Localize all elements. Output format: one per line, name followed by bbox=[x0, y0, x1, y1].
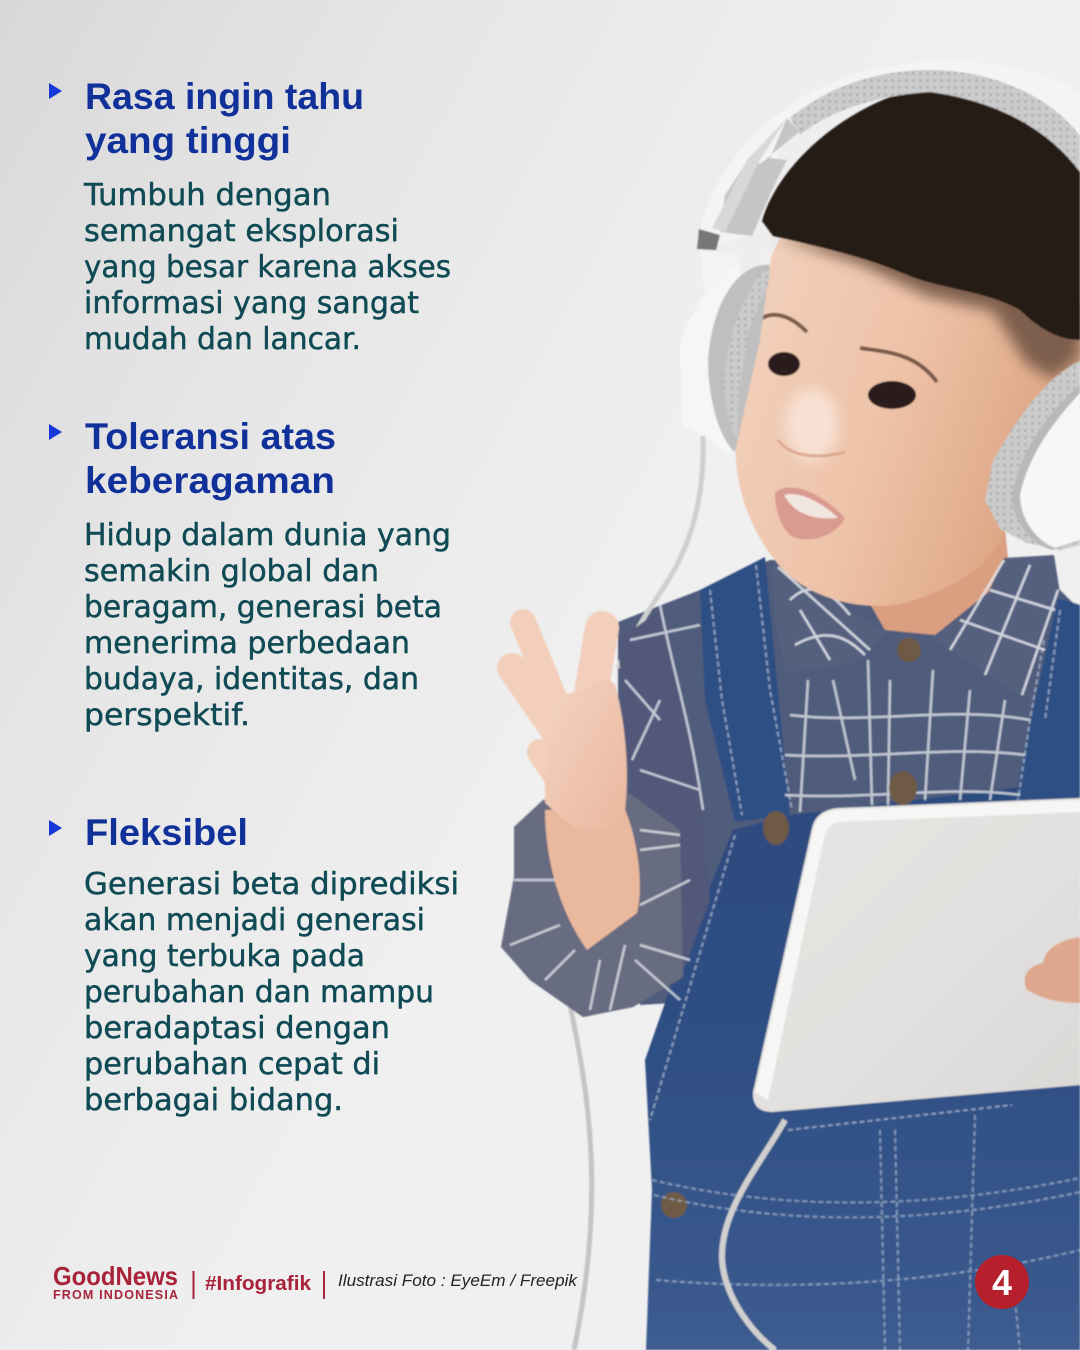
right hand on tablet bbox=[1025, 937, 1080, 1003]
headband slider bbox=[697, 118, 799, 300]
body text: perubahan dan mampu bbox=[84, 975, 434, 1010]
heading: yang tinggi bbox=[85, 120, 291, 161]
heading: Fleksibel bbox=[85, 812, 248, 853]
headphone cable bbox=[618, 436, 703, 668]
right collar bbox=[932, 555, 1060, 697]
heading: keberagaman bbox=[85, 460, 335, 501]
body text: berbagai bidang. bbox=[84, 1083, 343, 1118]
heading: Toleransi atas bbox=[85, 416, 336, 457]
logo: GoodNews from Indonesia bbox=[53, 1261, 178, 1302]
bullet bbox=[49, 83, 62, 99]
mouth bbox=[775, 487, 845, 540]
neck bbox=[845, 530, 1010, 635]
right overall strap bbox=[1013, 598, 1080, 810]
section: curiosity bbox=[49, 76, 451, 357]
body text: menerima perbedaan bbox=[84, 626, 410, 661]
left ear cup bbox=[680, 263, 770, 455]
tablet bbox=[753, 798, 1080, 1112]
strap stitching bbox=[650, 565, 1060, 1130]
fingers bbox=[512, 622, 602, 800]
tablet bevel bbox=[755, 800, 1080, 1100]
body text: Hidup dalam dunia yang bbox=[84, 518, 451, 553]
body text: perspektif. bbox=[84, 698, 250, 733]
rolled cuff bbox=[501, 793, 683, 1017]
body text: semangat eksplorasi bbox=[84, 214, 399, 249]
arm bbox=[545, 805, 640, 950]
headband bbox=[697, 61, 1080, 245]
body text: perubahan cepat di bbox=[84, 1047, 380, 1082]
face bbox=[736, 200, 1080, 606]
logo: GoodNews from Indonesia: GoodNews bbox=[53, 1261, 178, 1291]
photo: child with headphones and tablet bbox=[501, 61, 1080, 1350]
bullet bbox=[49, 424, 62, 440]
footer bbox=[53, 1255, 1029, 1309]
palm bbox=[545, 680, 627, 831]
sleeve bbox=[501, 610, 710, 1017]
body text: yang terbuka pada bbox=[84, 939, 365, 974]
section: flexible bbox=[49, 812, 459, 1118]
sleeve plaid bbox=[510, 830, 690, 1010]
body text bbox=[84, 867, 459, 1118]
right ear cup bbox=[985, 361, 1080, 550]
eyes bbox=[768, 352, 916, 409]
body text: semakin global dan bbox=[84, 554, 379, 589]
section: tolerance bbox=[49, 416, 451, 733]
body text: beradaptasi dengan bbox=[84, 1011, 390, 1046]
left overall strap bbox=[700, 557, 790, 822]
heading: Rasa ingin tahu bbox=[85, 76, 364, 117]
divider right bbox=[323, 1271, 325, 1299]
body text: mudah dan lancar. bbox=[84, 322, 361, 357]
page number badge: 4 bbox=[992, 1262, 1012, 1303]
eyebrows bbox=[753, 315, 937, 382]
left collar plaid bbox=[778, 567, 870, 660]
body text: yang besar karena akses bbox=[84, 250, 451, 285]
hair fade bbox=[773, 236, 1080, 379]
right collar plaid bbox=[950, 560, 1058, 695]
body text: budaya, identitas, dan bbox=[84, 662, 419, 697]
bullet bbox=[49, 820, 62, 836]
body text: Generasi beta diprediksi bbox=[84, 867, 459, 902]
shirt plaid bbox=[785, 660, 1030, 812]
hand bbox=[512, 622, 627, 831]
body text bbox=[83, 178, 451, 357]
overalls bbox=[645, 780, 1080, 1350]
cable behind the body bbox=[570, 1005, 592, 1350]
page number badge bbox=[975, 1255, 1029, 1309]
shirt buttons bbox=[661, 638, 921, 1218]
divider left bbox=[192, 1271, 194, 1299]
denim seams bbox=[652, 1115, 1080, 1350]
body text: akan menjadi generasi bbox=[84, 903, 425, 938]
text column bbox=[49, 76, 459, 1118]
nose bbox=[778, 389, 845, 461]
body text: beragam, generasi beta bbox=[84, 590, 442, 625]
hair bbox=[762, 92, 1080, 340]
logo: GoodNews from Indonesia: FROM INDONESIA bbox=[53, 1288, 178, 1302]
body text: informasi yang sangat bbox=[84, 286, 419, 321]
left collar bbox=[772, 565, 886, 673]
heading bbox=[85, 416, 336, 501]
body text: Tumbuh dengan bbox=[83, 178, 331, 213]
body text bbox=[84, 518, 451, 733]
shirt bbox=[618, 560, 1080, 1005]
heading bbox=[85, 76, 364, 161]
upper sleeve plaid bbox=[625, 605, 703, 810]
tablet cable bbox=[722, 1120, 785, 1350]
photo credit: Ilustrasi Foto : EyeEm / Freepik bbox=[338, 1271, 578, 1290]
hashtag: #Infografik bbox=[205, 1273, 312, 1295]
